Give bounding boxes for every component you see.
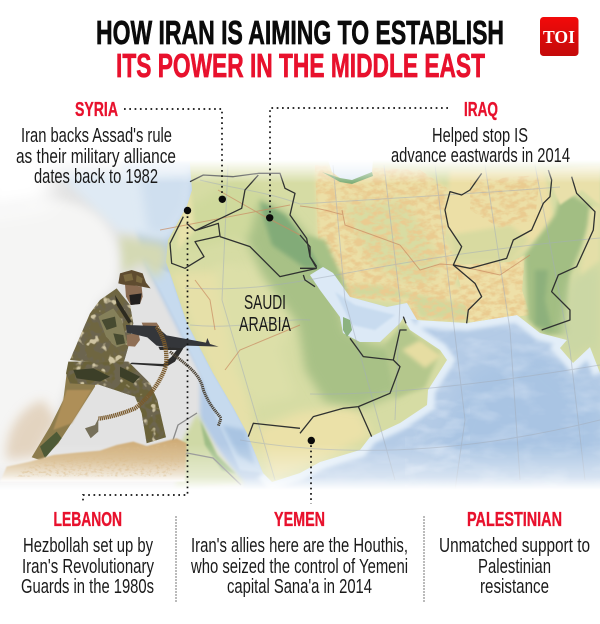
- yemen leader: [310, 440, 312, 504]
- syria text block: SYRIA: [75, 99, 118, 121]
- afghanistan and pakistan: [444, 172, 554, 250]
- map of the Middle East: [0, 160, 600, 490]
- torso: [70, 288, 133, 363]
- palestinian text block: PALESTINIAN: [467, 509, 562, 531]
- syria text block: dates back to 1982: [34, 166, 158, 188]
- syria text block: [16, 99, 176, 188]
- yemen text block: who seized the control of Yemeni: [190, 556, 408, 578]
- country borders: [168, 170, 595, 485]
- TOI logo: TOI: [543, 27, 575, 47]
- title: [96, 14, 504, 84]
- callout dots and leader lines: [83, 108, 448, 504]
- yemen text block: capital Sana'a in 2014: [227, 576, 372, 598]
- yemen text block: [190, 509, 408, 598]
- iraq text block: IRAQ: [464, 99, 498, 121]
- egypt land: [118, 236, 168, 280]
- front leg: [66, 362, 166, 443]
- east africa land: [175, 413, 245, 490]
- pale western area: [0, 160, 245, 490]
- map label: Saudi Arabia: [239, 292, 291, 336]
- indus green: [525, 190, 590, 335]
- smoke behind the soldier: [0, 150, 119, 470]
- palestinian text block: Palestinian: [478, 556, 551, 578]
- dust cloud: [6, 400, 57, 460]
- caspian sea: [329, 162, 372, 180]
- lebanon dot: [184, 207, 191, 214]
- iraq dot: [266, 214, 273, 222]
- green lowlands, Arabia and Gulf: [237, 197, 402, 408]
- sea: [122, 163, 600, 488]
- syria text block: Iran backs Assad's rule: [21, 125, 172, 147]
- lebanon text block: LEBANON: [54, 509, 122, 531]
- map label: Saudi Arabia: SAUDI: [244, 292, 286, 314]
- yemen text block: Iran's allies here are the Houthis,: [191, 535, 408, 557]
- sand ground: [0, 438, 187, 482]
- pale coastal shelf: [263, 315, 600, 482]
- TOI logo: [540, 17, 578, 56]
- yemen dot: [308, 437, 315, 444]
- lebanon text block: [21, 509, 154, 598]
- ammunition belts: [98, 327, 166, 419]
- graticule: [185, 165, 600, 490]
- iraq text block: Helped stop IS: [432, 125, 528, 147]
- lebanon text block: Hezbollah set up by: [23, 535, 153, 557]
- map label: Saudi Arabia: ARABIA: [239, 314, 291, 336]
- iraq text block: [391, 99, 570, 167]
- lebanon text block: Iran's Revolutionary: [22, 556, 154, 578]
- persian gulf: [310, 267, 417, 342]
- mediterranean: [55, 165, 192, 240]
- palestinian text block: [439, 509, 590, 598]
- yemen text block: YEMEN: [274, 509, 325, 531]
- arm: [98, 308, 127, 347]
- machine gun: [126, 325, 219, 349]
- iran mountains: [315, 165, 480, 322]
- red sea: [154, 270, 261, 472]
- soldier with machine gun: [0, 270, 221, 482]
- west arabia highlands: [174, 271, 256, 451]
- lebanon text block: Guards in the 1980s: [21, 576, 154, 598]
- yellow desert, Arabia: [224, 278, 229, 304]
- head: [125, 284, 143, 305]
- cap: [118, 270, 151, 288]
- iraq leader: [270, 108, 448, 218]
- syria leader: [124, 109, 222, 199]
- syria text block: as their military alliance: [16, 146, 176, 168]
- land base and relief: [160, 160, 600, 490]
- lebanon leader: [83, 211, 188, 504]
- rear leg: [32, 367, 97, 461]
- palestinian text block: resistance: [480, 576, 549, 598]
- syria dot: [219, 196, 226, 203]
- internal red relief lines: [160, 190, 530, 370]
